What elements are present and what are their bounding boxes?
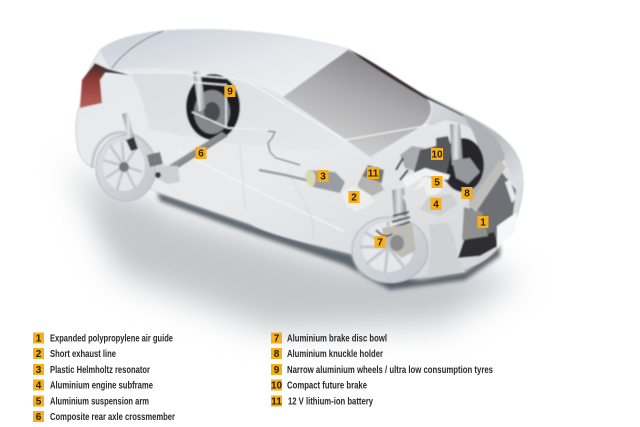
item 1: 1 (36, 334, 42, 344)
front shock and spring (376, 188, 416, 258)
item 8 (271, 348, 383, 360)
front fender panel (427, 222, 465, 277)
roof edge line (112, 31, 163, 68)
license plate (497, 212, 517, 248)
rear right shock absorber (193, 70, 206, 112)
item 10: Compact future brake (287, 380, 367, 392)
item 8: Aluminium knuckle holder (287, 349, 383, 360)
item 3 (33, 364, 150, 376)
rear wheel (96, 135, 156, 201)
tail dark seam (100, 69, 130, 75)
spare rear wheel (186, 74, 240, 140)
marker 3 (318, 170, 328, 182)
item 10 (271, 380, 367, 392)
item 6: 6 (36, 412, 42, 423)
marker 6: 6 (198, 148, 204, 160)
marker 1 (478, 216, 488, 228)
marker 10: 10 (431, 150, 443, 160)
exhaust pipe (259, 170, 335, 190)
item 2 (33, 348, 116, 360)
item 5 (33, 396, 149, 408)
axle crossmember (147, 132, 228, 184)
rear left shock absorber (122, 112, 138, 151)
item 9 (271, 364, 493, 376)
item 4: 4 (36, 380, 42, 392)
car cutaway illustration (76, 30, 523, 283)
floor shadow and reflection (70, 165, 520, 330)
front wheel housing (462, 114, 505, 208)
marker 9: 9 (227, 86, 233, 98)
marker 3: 3 (320, 172, 326, 182)
legend: right column (271, 332, 493, 408)
car body shell (76, 30, 523, 280)
rear arch (92, 132, 155, 168)
item 6: Composite rear axle crossmember (50, 412, 175, 423)
item 1: Expanded polypropylene air guide (50, 334, 173, 344)
marker 11: 11 (368, 168, 379, 180)
short exhaust (342, 186, 375, 212)
roof panel (100, 30, 348, 97)
item 6 (33, 411, 175, 423)
number markers on the car (196, 85, 488, 248)
front wheel (352, 217, 428, 283)
item 11 (271, 396, 373, 408)
marker 8: 8 (464, 188, 470, 200)
item 4 (33, 380, 153, 392)
headlight (505, 180, 516, 203)
marker 5: 5 (434, 178, 440, 188)
item 9: 9 (274, 365, 280, 376)
item 2: Short exhaust line (50, 349, 116, 360)
item 10: 10 (271, 380, 282, 392)
marker 7: 7 (377, 238, 383, 248)
A-pillar dark trim (348, 49, 482, 126)
door lines (100, 72, 430, 232)
marker 1: 1 (480, 218, 486, 228)
item 7: 7 (274, 334, 280, 344)
resonator (306, 170, 345, 193)
item 8: 8 (274, 349, 280, 360)
marker 8 (462, 187, 472, 200)
lithium battery (358, 165, 384, 196)
bumper structure (458, 160, 516, 258)
marker 2 (348, 191, 360, 204)
marker 6 (196, 147, 206, 160)
item 9: Narrow aluminium wheels / ultra low consumption tyres (287, 365, 493, 376)
item 5: 5 (36, 396, 42, 408)
legend: left column (33, 332, 175, 423)
item 11: 12 V lithium-ion battery (288, 396, 373, 408)
side glass (130, 71, 345, 152)
item 1 (33, 332, 173, 344)
marker 4 (430, 198, 442, 210)
marker 5 (432, 176, 442, 188)
front wing (425, 97, 523, 180)
item 7: Aluminium brake disc bowl (287, 334, 387, 344)
item 5: Aluminium suspension arm (50, 396, 149, 408)
windshield (283, 50, 431, 157)
tail light (80, 63, 108, 108)
item 4: Aluminium engine subframe (50, 380, 153, 392)
manifold piece (402, 186, 428, 209)
marker 9 (224, 85, 236, 98)
marker 2: 2 (351, 192, 357, 204)
suspension links (190, 75, 272, 130)
item 11: 11 (271, 396, 282, 408)
item 2: 2 (36, 349, 42, 360)
item 3: 3 (36, 365, 42, 376)
item 7 (271, 332, 387, 344)
item 3: Plastic Helmholtz resonator (50, 365, 150, 376)
marker 4: 4 (433, 200, 439, 210)
marker 7 (374, 236, 386, 248)
engine bay (396, 124, 484, 216)
